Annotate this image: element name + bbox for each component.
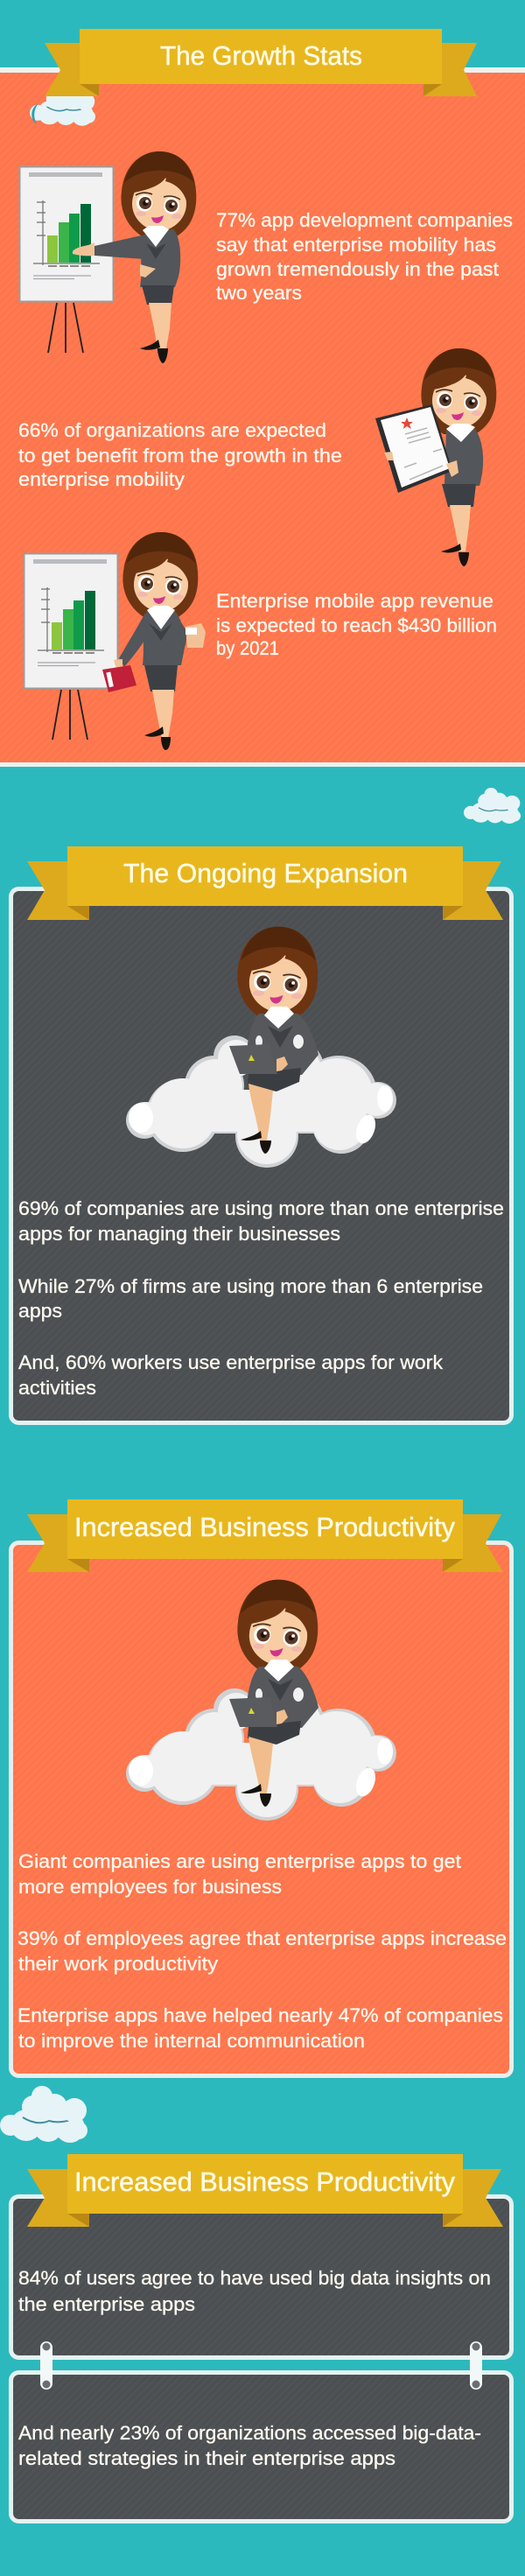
text: productivity stats: 39% of employees agree that enterprise apps increase [18,1927,507,1949]
banner: the growth stats [45,29,477,96]
icon: cloud lower left [0,2086,88,2143]
stat: $430 billion: is expected to reach $430 billion [216,614,497,636]
text: ongoing expansion stats: And, 60% workers use enterprise apps for work [18,1351,444,1373]
illustration: woman on cloud with laptop [126,927,396,1168]
title: The Ongoing Expansion [123,858,408,888]
stat: 66%: enterprise mobility [18,468,185,490]
text: productivity stats [18,1850,507,2052]
text: big data insights [18,2267,491,2315]
text: ongoing expansion stats: activities [18,1377,96,1399]
stat: 77%: say that enterprise mobility has [216,234,496,256]
text: big data insights: the enterprise apps [18,2293,195,2315]
illustration: woman on cloud with laptop [126,1580,396,1821]
text: ongoing expansion stats: apps for managing their businesses [18,1223,340,1245]
panel: increased business productivity [10,1542,511,2076]
text: ongoing expansion stats: While 27% of firms are using more than 6 enterprise [18,1275,483,1297]
text: big data strategies: And nearly 23% of organizations accessed big-data- [18,2422,481,2444]
text: big data insights: 84% of users agree to have used big data insights on [18,2267,491,2289]
panel: ongoing expansion [10,889,511,1423]
stat: 77%: grown tremendously in the past [216,258,499,280]
banner: the ongoing expansion [27,846,503,920]
stat: 66%: to get benefit from the growth in the [18,445,342,467]
stat: $430 billion: Enterprise mobile app revenue [216,590,494,612]
title: Increased Business Productivity [74,1512,455,1542]
text: productivity stats: to improve the internal communication [18,2030,365,2052]
text: productivity stats: Enterprise apps have helped nearly 47% of companies [18,2004,503,2026]
text: productivity stats: Giant companies are using enterprise apps to get [18,1850,461,1872]
stat: 66%: 66% of organizations are expected [18,419,326,441]
text: big data strategies [18,2422,481,2469]
stat: $430 billion [216,590,497,659]
title: The Growth Stats [160,40,362,71]
text: ongoing expansion stats [18,1197,504,1399]
illustration: woman holding certificate [375,348,496,566]
stat: 66% [18,419,342,490]
panel: big data insights [10,2197,511,2358]
text: productivity stats: their work productivity [18,1953,218,1975]
text: productivity stats: more employees for business [18,1876,282,1898]
banner: increased business productivity 2 [27,2154,503,2227]
title: Increased Business Productivity [74,2166,455,2197]
panel: big data strategies [10,2372,511,2521]
stat: 77%: two years [216,282,302,304]
illustration: woman with book and chart [24,532,206,750]
stat: 77%: 77% app development companies [216,209,513,231]
connector: left [40,2341,52,2390]
icon: cloud top left [30,83,95,126]
text: ongoing expansion stats: 69% of companies are using more than one enterprise [18,1197,504,1219]
banner: increased business productivity [27,1499,503,1572]
text: big data strategies: related strategies in their enterprise apps [18,2447,396,2469]
icon: cloud right [464,788,521,824]
stat: $430 billion: by 2021 [216,637,279,659]
illustration: woman presenting chart [19,151,196,363]
connector: right [470,2341,482,2390]
panel: growth stats [0,67,525,767]
stat: 77% [216,209,513,304]
text: ongoing expansion stats: apps [18,1300,62,1322]
